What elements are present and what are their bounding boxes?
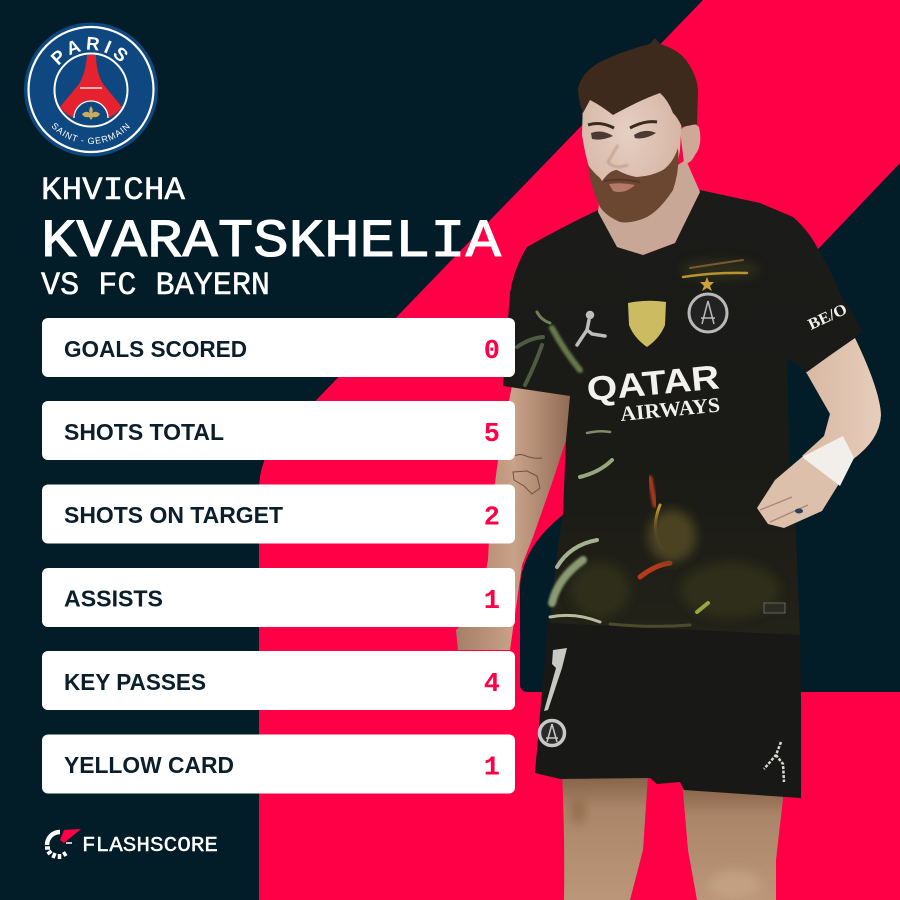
crest: Eiffel tower [60, 55, 122, 118]
player: jersey olive glow [570, 260, 780, 618]
crest: fleur-de-lis [82, 106, 100, 120]
player: sponsor QATAR: QATAR [585, 358, 721, 409]
player: jersey club badge [689, 294, 727, 332]
player: right hand [757, 457, 840, 528]
crest: PARIS: PARIS [50, 36, 128, 66]
player: jersey jumpman logo [577, 312, 605, 345]
player: jersey gold champions patch [628, 301, 666, 347]
player: nose shadow [608, 145, 628, 167]
player: jersey [503, 190, 862, 635]
player: jersey label [764, 603, 785, 613]
stat row: shots on target [42, 484, 515, 544]
player: ear [680, 124, 700, 163]
heading: first name: KHVICHA [41, 172, 186, 209]
stat row: shots on target: SHOTS ON TARGET [64, 502, 283, 528]
player: hair [578, 38, 698, 127]
player: sponsor AIRWAYS: AIRWAYS [619, 393, 721, 426]
player: beard [588, 148, 678, 222]
stat row: goals scored: GOALS SCORED [64, 336, 247, 362]
player: shorts number 7 [544, 648, 567, 711]
stat row: assists: 1 [484, 587, 500, 617]
stat row: shots on target: 2 [484, 504, 500, 534]
brand logo: Flashscore [45, 829, 218, 859]
stat row: yellow card: 1 [484, 754, 500, 784]
club crest: Paris Saint-Germain [24, 22, 158, 156]
background: red diagonal shape [259, 0, 900, 900]
player: mouth [604, 180, 640, 192]
player: hand fingers [760, 497, 808, 522]
player photo [456, 38, 881, 900]
player: eyes [588, 122, 657, 140]
logo: gauge icon [45, 829, 81, 859]
heading: opponent: VS FC BAYERN [41, 267, 270, 304]
crest: SAINT-GERMAIN: SAINT - GERMAIN [52, 123, 130, 144]
stat row: assists [42, 568, 515, 627]
player: shorts badge [540, 720, 564, 746]
stat row: yellow card [42, 734, 515, 794]
stat row: assists: ASSISTS [64, 586, 163, 612]
stat row: key passes: KEY PASSES [64, 669, 206, 695]
stat row: shots total: SHOTS TOTAL [64, 419, 224, 445]
stat row: shots total: 5 [484, 420, 500, 450]
player: shorts jumpman logo [764, 742, 784, 782]
player: sleeve sponsor: BE/O [806, 301, 850, 334]
player: jersey artwork swirls [517, 260, 747, 626]
stat row: goals scored: 0 [484, 337, 500, 367]
player: shorts [535, 620, 801, 798]
player: legs [562, 770, 784, 900]
stat row: key passes: 4 [484, 670, 500, 700]
crest: tower arch [74, 101, 108, 118]
stat row: key passes [42, 651, 515, 710]
player: jersey star [700, 277, 714, 291]
player: wrist tape [802, 436, 854, 486]
player: left arm [456, 385, 572, 650]
stat row: shots total [42, 401, 515, 460]
logo: wordmark: FLASHSCORE [82, 835, 218, 858]
stat row: yellow card: YELLOW CARD [64, 752, 234, 778]
player: jersey golden ball artwork [648, 510, 696, 562]
player: right arm [802, 338, 881, 470]
stat row: goals scored [42, 318, 515, 377]
player: tattoo [513, 454, 542, 494]
crest: tower platform [80, 87, 102, 89]
player: face [582, 85, 682, 222]
heading: surname: KVARATSKHELIA [41, 212, 502, 273]
player: neck [598, 160, 700, 255]
